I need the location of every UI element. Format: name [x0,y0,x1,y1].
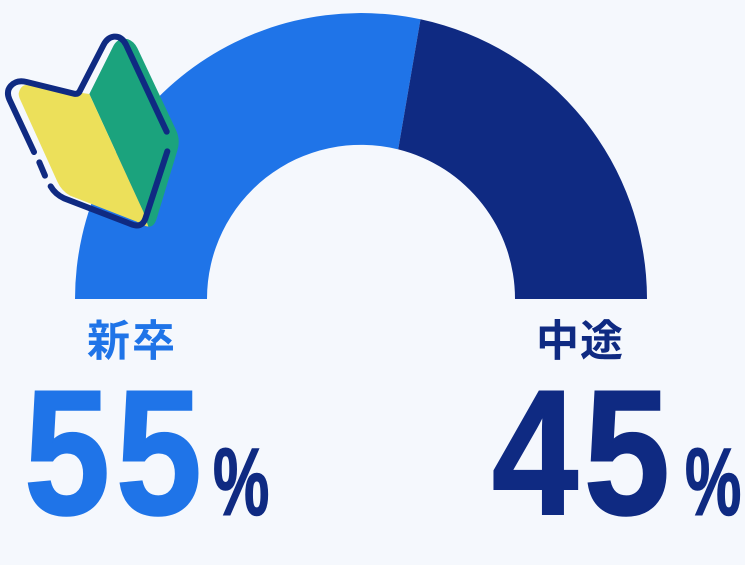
label: new graduates: 新卒 [87,318,177,366]
value: 45: 45 [492,354,676,552]
value: 55: 55 [24,354,208,552]
percent sign: new graduates: % [213,429,269,536]
segment: mid-career 45% [398,19,647,299]
green wing [89,39,179,227]
label: mid-career: 中途 [536,318,624,366]
yellow wing [19,85,148,227]
percent sign: mid-career: % [685,429,741,536]
icon: beginner driver mark [8,37,179,227]
semi-donut chart [75,13,647,299]
dashed outline [8,37,167,225]
segment: new graduates 55% [75,13,420,299]
